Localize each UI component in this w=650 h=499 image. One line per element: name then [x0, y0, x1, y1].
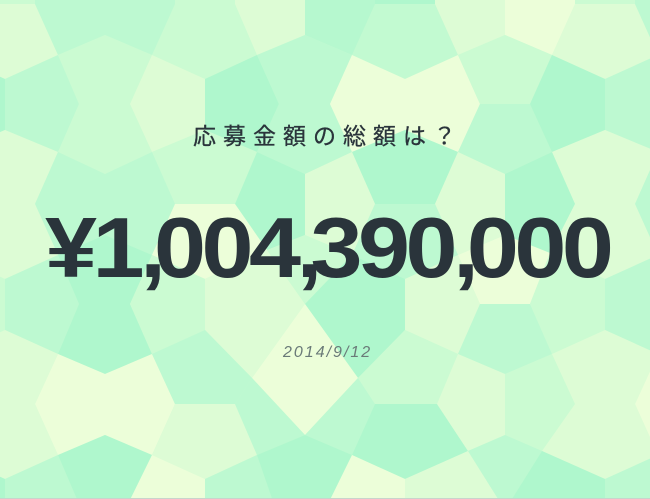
total amount figure: ¥1,004,390,000 [45, 201, 609, 296]
date: 2014/9/12 [283, 344, 372, 361]
heading: 応募金額の総額は？ [193, 123, 463, 149]
